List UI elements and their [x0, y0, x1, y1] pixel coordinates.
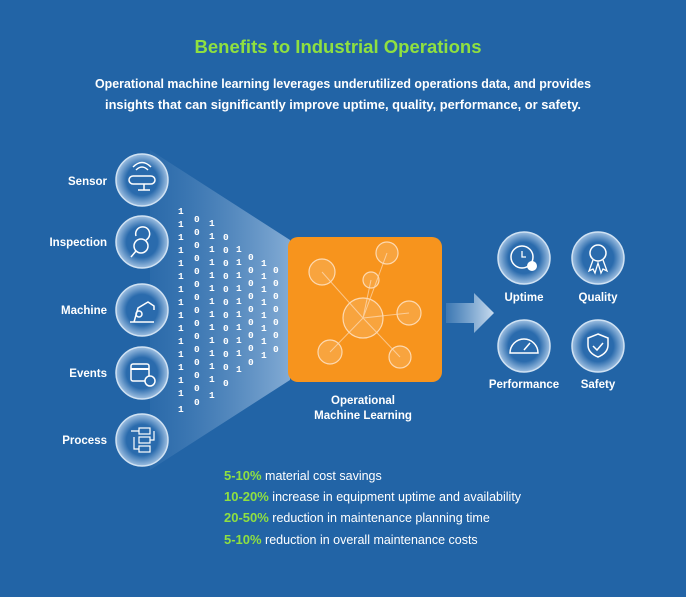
binary data: 0	[273, 291, 279, 302]
binary data: 1	[178, 245, 184, 256]
binary data: 0	[223, 284, 229, 295]
binary data: 0	[223, 245, 229, 256]
binary data: 1	[236, 296, 242, 307]
binary data: 1	[261, 350, 267, 361]
binary data: 1	[236, 283, 242, 294]
source: inspection	[49, 216, 168, 268]
outcomes	[489, 232, 624, 391]
binary data: 1	[236, 364, 242, 375]
binary data: 1	[209, 244, 215, 255]
binary data: 1	[209, 257, 215, 268]
binary data: 1	[178, 362, 184, 373]
binary data: 0	[194, 331, 200, 342]
binary data: 1	[178, 206, 184, 217]
binary data: 0	[223, 323, 229, 334]
binary data: 1	[178, 349, 184, 360]
binary data: 0	[248, 291, 254, 302]
binary data: 1	[236, 335, 242, 346]
binary data: 1	[209, 361, 215, 372]
binary data: 0	[194, 292, 200, 303]
binary data: 1	[209, 348, 215, 359]
binary data: 1	[178, 404, 184, 415]
source: sensor: Sensor	[68, 176, 108, 188]
binary data: 0	[194, 357, 200, 368]
binary data: 1	[261, 297, 267, 308]
binary data: 0	[194, 397, 200, 408]
binary data: 1	[209, 374, 215, 385]
binary data: 0	[248, 304, 254, 315]
binary data: 1	[178, 219, 184, 230]
binary data: 0	[194, 305, 200, 316]
outcome: safety	[572, 320, 624, 391]
binary data: 1	[261, 258, 267, 269]
binary data: 1	[178, 388, 184, 399]
binary data: 0	[273, 304, 279, 315]
binary data: 0	[194, 214, 200, 225]
binary data: 1	[261, 323, 267, 334]
ML label: Machine Learning	[314, 410, 412, 422]
statistics: 10-20% increase in equipment uptime and availability	[224, 489, 522, 504]
binary data: 0	[223, 232, 229, 243]
binary data: 0	[248, 265, 254, 276]
binary data: 0	[223, 349, 229, 360]
binary data: 1	[261, 284, 267, 295]
binary data: 0	[223, 378, 229, 389]
binary data: 1	[178, 284, 184, 295]
title: Benefits to Industrial Operations	[194, 36, 482, 57]
binary data: 1	[236, 270, 242, 281]
binary data: 0	[194, 318, 200, 329]
binary data: 1	[209, 231, 215, 242]
binary data: 1	[209, 390, 215, 401]
binary data: 0	[194, 240, 200, 251]
statistics: 5-10% reduction in overall maintenance costs	[224, 532, 478, 547]
binary data: 1	[178, 375, 184, 386]
binary data: 1	[236, 244, 242, 255]
binary data: 1	[209, 283, 215, 294]
outcome: quality	[572, 232, 624, 304]
binary data: 1	[178, 258, 184, 269]
binary data: 0	[194, 253, 200, 264]
binary data: 0	[223, 362, 229, 373]
outcome: uptime: Uptime	[505, 292, 543, 304]
binary data: 1	[261, 310, 267, 321]
binary data: 1	[178, 323, 184, 334]
outcome: safety: Safety	[581, 379, 616, 391]
funnel	[150, 150, 290, 470]
outcome: performance	[489, 320, 559, 391]
subtitle: insights that can significantly improve uptime, quality, performance, or safety.	[105, 97, 581, 112]
binary data: 1	[178, 297, 184, 308]
source: process: Process	[62, 435, 107, 447]
statistics: 5-10% material cost savings	[224, 468, 382, 483]
binary data: 0	[248, 357, 254, 368]
arrow	[446, 293, 494, 333]
binary data: 0	[248, 252, 254, 263]
binary data: 0	[194, 370, 200, 381]
binary data: 0	[248, 317, 254, 328]
binary data: 0	[248, 330, 254, 341]
binary data: 1	[209, 218, 215, 229]
binary data: 0	[248, 343, 254, 354]
source: process	[62, 414, 168, 466]
binary data: 0	[273, 344, 279, 355]
binary data: 1	[209, 309, 215, 320]
binary data: 1	[178, 232, 184, 243]
binary data: 1	[178, 336, 184, 347]
binary data: 1	[209, 296, 215, 307]
subtitle	[95, 76, 591, 112]
binary data: 0	[223, 310, 229, 321]
binary data: 1	[209, 322, 215, 333]
binary data: 0	[273, 265, 279, 276]
source: events	[69, 347, 168, 399]
binary data: 0	[248, 278, 254, 289]
left sources	[49, 154, 168, 466]
binary data: 0	[223, 258, 229, 269]
binary data: 0	[194, 266, 200, 277]
binary data: 0	[223, 271, 229, 282]
source: machine: Machine	[61, 305, 107, 317]
binary data: 0	[273, 330, 279, 341]
binary data: 0	[194, 383, 200, 394]
binary data: 0	[223, 336, 229, 347]
binary data: 1	[261, 336, 267, 347]
statistics	[224, 468, 522, 547]
statistics: 20-50% reduction in maintenance planning time	[224, 510, 490, 525]
outcome: uptime	[498, 232, 550, 304]
binary data	[178, 206, 279, 415]
binary data: 0	[194, 227, 200, 238]
binary data: 0	[273, 278, 279, 289]
binary data: 1	[236, 322, 242, 333]
binary data: 1	[209, 270, 215, 281]
binary data: 0	[194, 344, 200, 355]
binary data: 1	[236, 348, 242, 359]
binary data: 1	[261, 271, 267, 282]
binary data: 1	[178, 271, 184, 282]
binary data: 1	[236, 309, 242, 320]
binary data: 0	[273, 317, 279, 328]
source: events: Events	[69, 368, 107, 380]
binary data: 0	[194, 279, 200, 290]
source: inspection: Inspection	[49, 237, 107, 249]
ML label	[314, 395, 412, 422]
outcome: performance: Performance	[489, 379, 559, 391]
subtitle: Operational machine learning leverages underutilized operations data, and provides	[95, 76, 591, 91]
ML box	[288, 237, 442, 382]
source: sensor	[68, 154, 168, 206]
outcome: quality: Quality	[579, 292, 618, 304]
binary data: 1	[209, 335, 215, 346]
binary data: 1	[178, 310, 184, 321]
source: machine	[61, 284, 168, 336]
ML label: Operational	[331, 395, 395, 407]
binary data: 1	[236, 257, 242, 268]
binary data: 0	[223, 297, 229, 308]
